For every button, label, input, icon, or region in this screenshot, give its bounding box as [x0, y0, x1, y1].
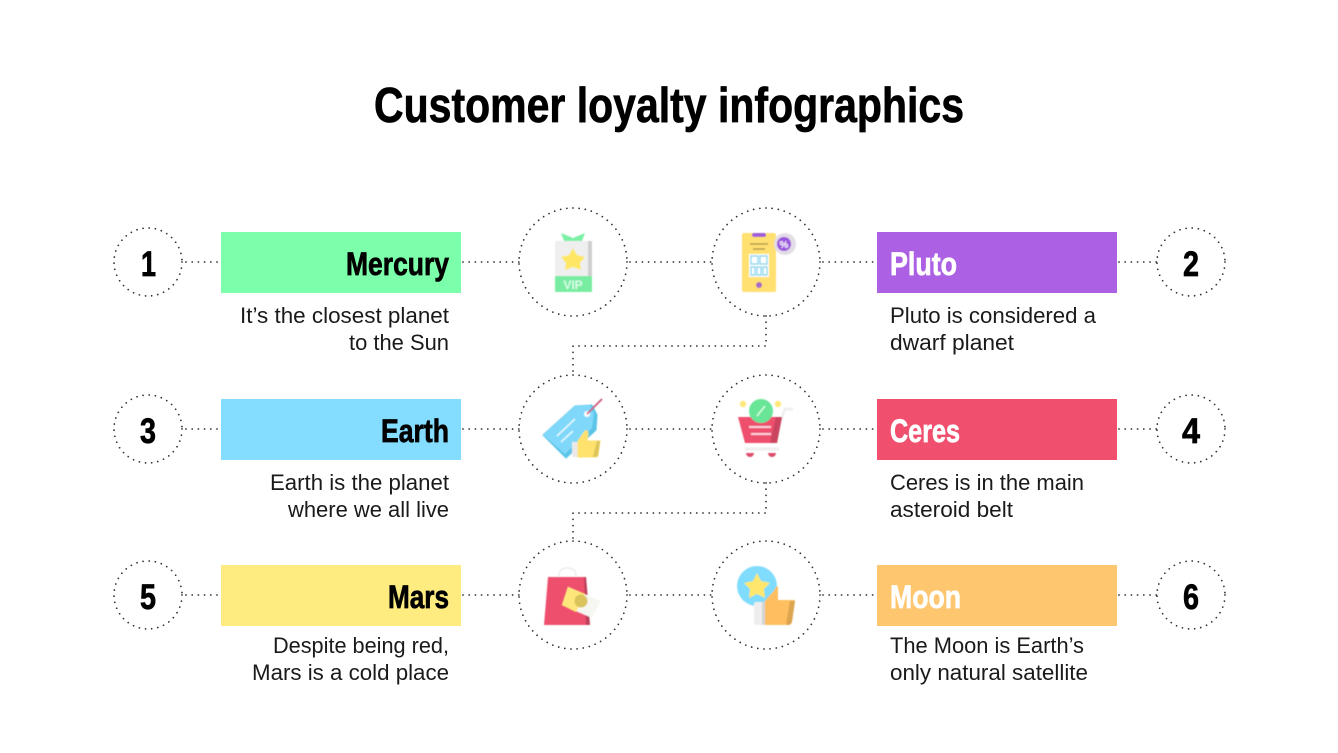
- Moon description: [890, 633, 1088, 685]
- icon: VIP badge: [519, 208, 627, 316]
- Mercury description: [240, 303, 449, 355]
- Pluto description: dwarf planet: [890, 330, 1014, 355]
- Earth banner: Earth: [381, 413, 449, 449]
- row 3 left: Mars: [114, 561, 461, 685]
- Mars banner: Mars: [388, 579, 449, 615]
- row 2 right: Ceres: [877, 395, 1225, 522]
- number circle 2: [1157, 228, 1225, 296]
- icon: shopping bag with gift card: [519, 541, 627, 649]
- Mercury description: It’s the closest planet: [240, 303, 449, 328]
- Moon description: The Moon is Earth’s: [890, 633, 1084, 658]
- Earth description: where we all live: [287, 497, 449, 522]
- Ceres banner: [877, 399, 1117, 460]
- Pluto description: Pluto is considered a: [890, 303, 1097, 328]
- row 3 right: Moon: [877, 561, 1225, 685]
- Moon description: only natural satellite: [890, 660, 1088, 685]
- number circle 2: 2: [1183, 245, 1199, 284]
- Pluto banner: [877, 232, 1117, 293]
- Earth description: Earth is the planet: [270, 470, 449, 495]
- number circle 5: 5: [140, 578, 156, 617]
- Pluto description: [890, 303, 1097, 355]
- icon: shopping cart with discount badge: [712, 375, 820, 483]
- icon: VIP badge: VIP: [563, 278, 583, 292]
- Mars banner: [221, 565, 461, 626]
- Mars description: Despite being red,: [273, 633, 449, 658]
- title: Customer loyalty infographics: [374, 79, 964, 133]
- Mercury banner: [221, 232, 461, 293]
- Ceres description: Ceres is in the main: [890, 470, 1084, 495]
- Moon banner: Moon: [890, 579, 961, 615]
- icon: star badge with thumbs up: [712, 541, 820, 649]
- Mars description: Mars is a cold place: [252, 660, 449, 685]
- icon: phone with QR code: %: [780, 240, 789, 251]
- Mercury description: to the Sun: [349, 330, 449, 355]
- number circle 6: 6: [1183, 578, 1199, 617]
- row 1 right: Pluto: [877, 228, 1225, 355]
- number circle 3: [114, 395, 182, 463]
- number circle 4: 4: [1182, 412, 1200, 451]
- row 2 left: Earth: [114, 395, 461, 522]
- Ceres banner: Ceres: [890, 413, 960, 449]
- number circle 5: [114, 561, 182, 629]
- number circle 4: [1157, 395, 1225, 463]
- Ceres description: [890, 470, 1084, 522]
- Ceres description: asteroid belt: [890, 497, 1013, 522]
- number circle 1: [114, 228, 182, 296]
- number circle 3: 3: [140, 412, 156, 451]
- number circle 1: 1: [141, 245, 156, 284]
- row 1 left: Mercury: [114, 228, 461, 355]
- connectors: dotted lines: [186, 262, 1157, 595]
- icon: price tag with thumbs up: [519, 375, 627, 483]
- number circle 6: [1157, 561, 1225, 629]
- Earth banner: [221, 399, 461, 460]
- Earth description: [270, 470, 449, 522]
- icon: phone with QR code: [712, 208, 820, 316]
- Mars description: [252, 633, 449, 685]
- Mercury banner: Mercury: [346, 246, 449, 282]
- Moon banner: [877, 565, 1117, 626]
- Pluto banner: Pluto: [890, 246, 957, 282]
